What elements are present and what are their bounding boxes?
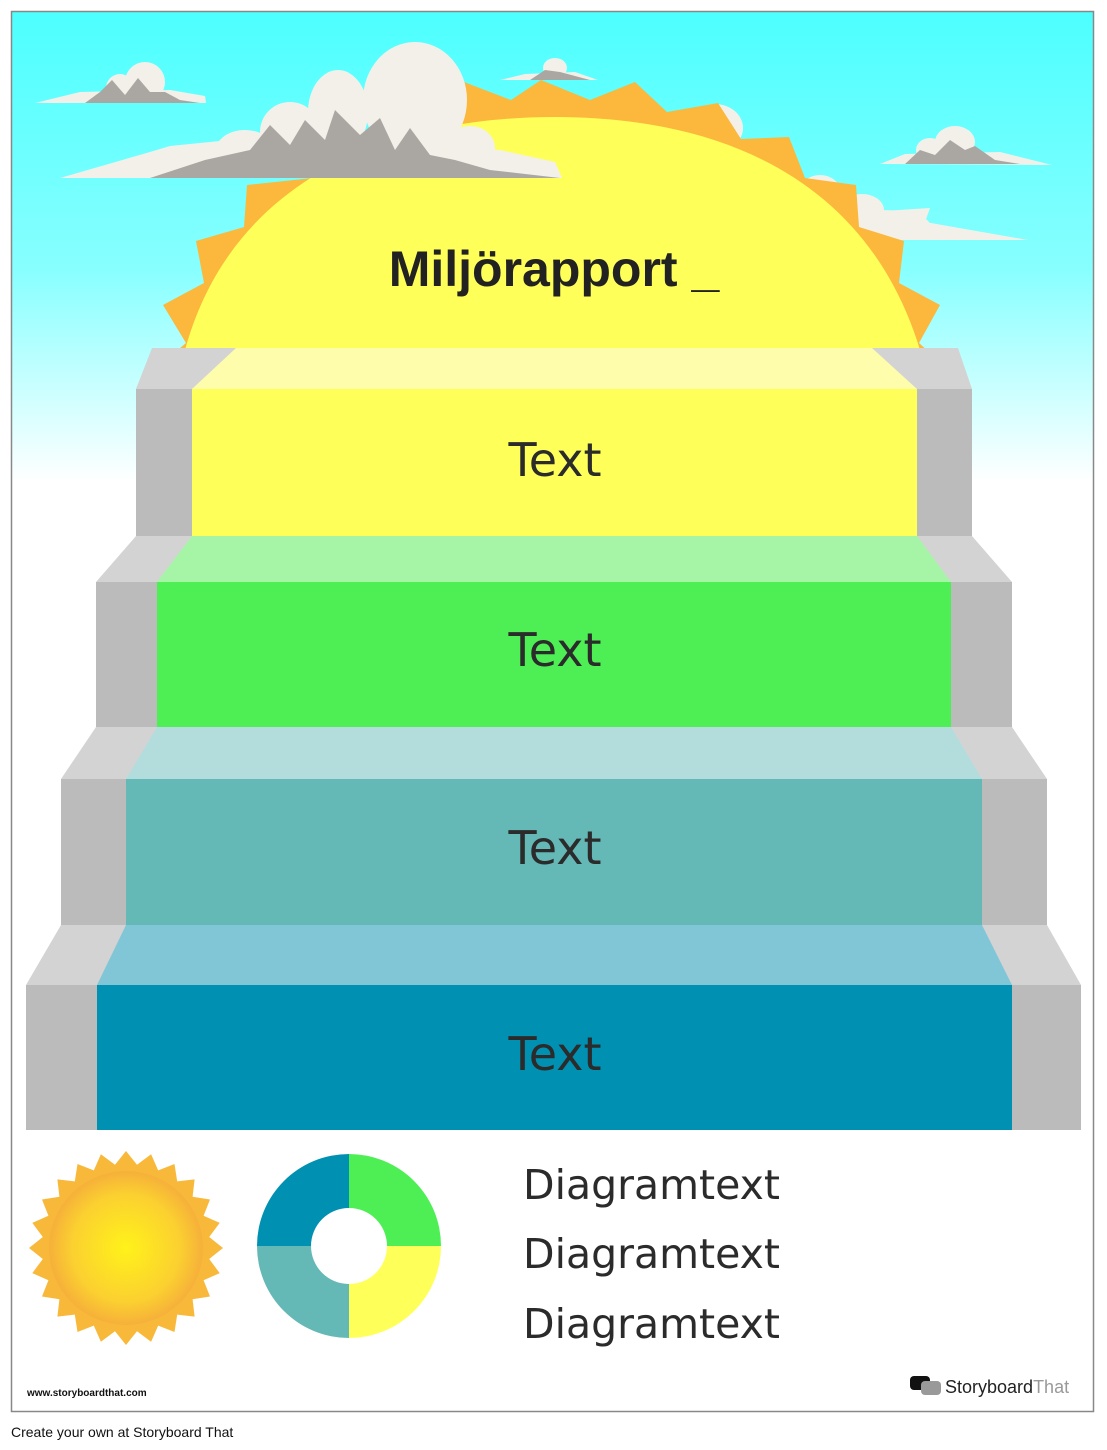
credit: Create your own at Storyboard That: [11, 1424, 233, 1440]
step 1: [136, 348, 972, 536]
cloud: big: [60, 42, 562, 178]
step 1: Text: [507, 433, 602, 487]
cloud: right: [880, 126, 1052, 165]
title: Miljörapport _: [389, 241, 720, 297]
step 3: Text: [507, 821, 602, 875]
step 2: [96, 536, 1012, 727]
sky background: [12, 12, 1093, 482]
step 4: [26, 925, 1081, 1130]
diagram labels: Diagramtext: [523, 1300, 780, 1348]
step 4: Text: [507, 1027, 602, 1081]
step 2: Text: [507, 623, 602, 677]
logo: StoryboardThat: [945, 1377, 1069, 1397]
sun rays: [145, 80, 958, 378]
donut chart: [257, 1154, 441, 1338]
diagram labels: Diagramtext: [523, 1230, 780, 1278]
diagram labels: Diagramtext: [523, 1161, 780, 1209]
cloud: small left: [35, 62, 206, 103]
sun body: [185, 117, 920, 350]
cloud: tiny top: [500, 58, 598, 80]
diagram labels: [523, 1161, 780, 1348]
step 3: [61, 727, 1047, 925]
cloud: behind sun right: [687, 104, 1028, 240]
icon: sun: [29, 1151, 223, 1345]
footer url: www.storyboardthat.com: [26, 1388, 147, 1399]
